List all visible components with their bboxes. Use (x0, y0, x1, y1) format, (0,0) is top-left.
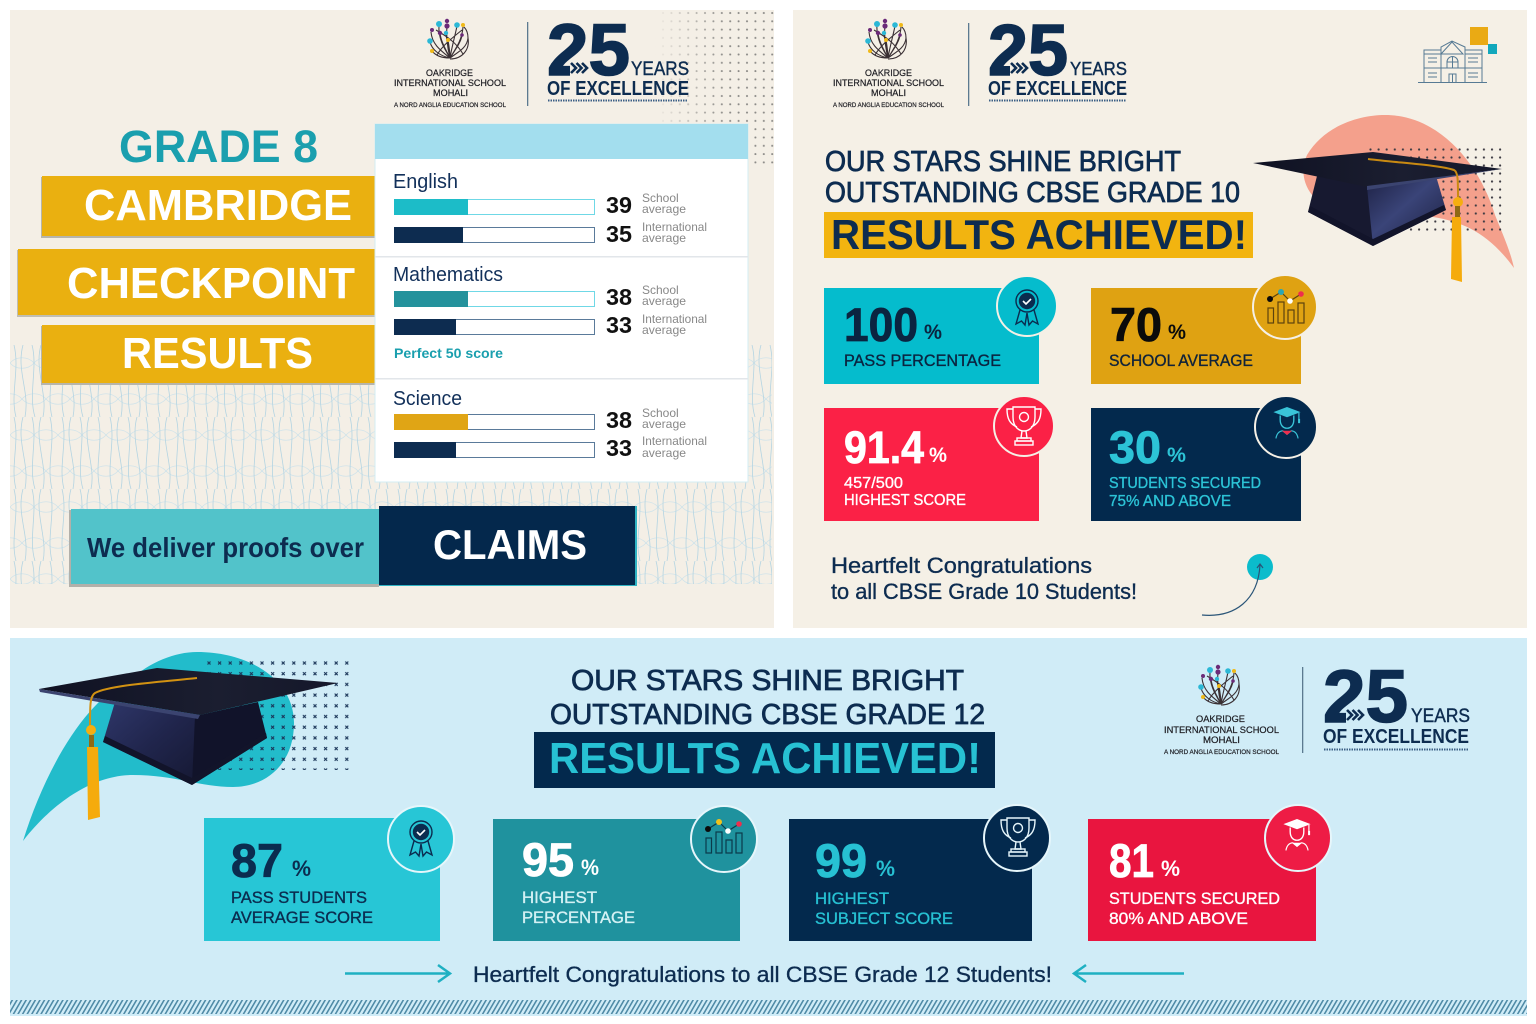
subject: English: average (642, 231, 686, 245)
25 years of excellence mark: OF EXCELLENCE (1323, 726, 1469, 748)
school logo: INTERNATIONAL SCHOOL (833, 78, 944, 88)
graduation cap with teal blob (23, 652, 351, 841)
card: 81% students secured: % (1161, 856, 1180, 881)
card: 30% students secured: 75% AND ABOVE (1109, 493, 1231, 510)
card: 70% school average: % (1168, 321, 1186, 344)
25 years of excellence mark (988, 11, 1127, 100)
card: 87% pass students average score: % (292, 856, 311, 881)
25 years of excellence mark: YEARS (1411, 706, 1470, 727)
card: 99% highest subject score: HIGHEST (815, 889, 889, 908)
subject: Science (393, 388, 707, 461)
card: 100% pass percentage: 100 (844, 298, 918, 351)
icon: trophy (984, 805, 1050, 871)
icon: graduate (1255, 396, 1317, 458)
25 years of excellence mark: YEARS (631, 59, 689, 80)
subject: Mathematics: average (642, 323, 686, 337)
card: 91.4% highest score (824, 396, 1054, 521)
school logo: INTERNATIONAL SCHOOL (394, 78, 506, 88)
tagline: proofs over claims: CLAIMS (433, 521, 587, 568)
heading: RESULTS ACHIEVED! (549, 734, 981, 783)
card: 81% students secured: 81 (1109, 834, 1154, 887)
arrow: left-pointing teal (1074, 965, 1184, 982)
subject: Science: 38 (606, 407, 632, 433)
heading: Grade 8: GRADE 8 (119, 121, 318, 172)
tagline: proofs over claims (69, 506, 637, 587)
school logo: MOHALI (871, 88, 906, 98)
school logo: A NORD ANGLIA EDUCATION SCHOOL (394, 102, 506, 109)
25 years of excellence mark: 25 (547, 10, 630, 91)
heading: RESULTS ACHIEVED! (831, 211, 1247, 258)
card: 81% students secured: 80% AND ABOVE (1109, 909, 1248, 928)
icon: ribbon (388, 806, 454, 872)
school logo (394, 19, 506, 109)
card: 30% students secured: STUDENTS SECURED (1109, 475, 1261, 492)
card: 99% highest subject score: 99 (815, 834, 867, 887)
congratulations message (831, 553, 1137, 604)
icon: ribbon (997, 276, 1057, 336)
school logo: MOHALI (433, 88, 468, 98)
card: 91.4% highest score: 457/500 (844, 475, 903, 492)
card: 99% highest subject score (789, 805, 1050, 941)
congratulations message: Heartfelt Congratulations (831, 553, 1092, 578)
school logo: MOHALI (1203, 735, 1240, 745)
card: 87% pass students average score: PASS STUDENTS (231, 888, 367, 907)
school logo: INTERNATIONAL SCHOOL (1164, 725, 1279, 735)
25 years of excellence mark: OF EXCELLENCE (547, 78, 689, 100)
heading (534, 665, 995, 788)
icon: bar chart (1253, 275, 1317, 339)
card: 91.4% highest score: % (929, 444, 947, 467)
subject: Science: Science (393, 388, 462, 410)
card: 95% highest percentage (493, 806, 757, 941)
subject: English: School (642, 191, 679, 205)
subject: Mathematics: Mathematics (393, 264, 503, 286)
heading (824, 146, 1253, 258)
subject: Mathematics (393, 264, 707, 361)
subject: Science: average (642, 446, 686, 460)
25 years of excellence mark: 25 (1323, 655, 1408, 738)
icon: bar chart (691, 806, 757, 872)
arrow: curved up to teal dot (1202, 554, 1273, 615)
card: 70% school average (1091, 275, 1317, 384)
subject: English: International (642, 220, 707, 234)
banner: Results: RESULTS (122, 329, 313, 378)
subject: Mathematics: 38 (606, 284, 632, 310)
card: 91.4% highest score: 91.4 (844, 422, 924, 473)
subject: Science: average (642, 417, 686, 431)
25 years of excellence mark: OF EXCELLENCE (988, 78, 1127, 100)
results table (375, 124, 748, 482)
arrow: right-pointing teal (345, 965, 450, 982)
banner: Checkpoint (17, 249, 375, 317)
card: 70% school average: 70 (1110, 298, 1162, 351)
card: 100% pass percentage: PASS PERCENTAGE (844, 351, 1001, 370)
25 years of excellence mark: YEARS (1070, 58, 1127, 79)
25 years of excellence mark (547, 10, 689, 100)
card: 70% school average: SCHOOL AVERAGE (1109, 351, 1253, 370)
icon: graduate (1265, 805, 1331, 871)
card: 81% students secured: STUDENTS SECURED (1109, 889, 1280, 908)
card: 95% highest percentage: HIGHEST (522, 888, 597, 907)
heading: OUTSTANDING CBSE GRADE 12 (550, 699, 985, 731)
subject: English: average (642, 202, 686, 216)
graduation cap with salmon blob (1253, 115, 1514, 282)
25 years of excellence mark: 25 (988, 11, 1068, 91)
school logo: OAKRIDGE (1196, 714, 1245, 724)
card: 30% students secured: 30 (1109, 422, 1161, 473)
tagline: proofs over claims: We deliver proofs over (87, 532, 364, 563)
subject: Mathematics: 33 (606, 312, 632, 338)
heading: OUR STARS SHINE BRIGHT (825, 146, 1181, 178)
subject: English: 35 (606, 221, 632, 247)
banner: Checkpoint: CHECKPOINT (67, 259, 355, 308)
subject: English: 39 (606, 192, 632, 218)
subject: Mathematics: Perfect 50 score (394, 345, 503, 361)
subject: Science: 33 (606, 435, 632, 461)
card: 87% pass students average score: AVERAGE SCORE (231, 908, 373, 927)
subject: Science: School (642, 406, 679, 420)
card: 87% pass students average score (204, 806, 454, 941)
subject: Mathematics: School (642, 283, 679, 297)
panel: CBSE Grade 10 results (793, 10, 1527, 628)
card: 30% students secured: % (1167, 444, 1186, 467)
card: 81% students secured (1088, 805, 1331, 941)
card: 30% students secured (1091, 396, 1317, 521)
school logo: A NORD ANGLIA EDUCATION SCHOOL (1164, 749, 1279, 756)
panel: CBSE Grade 12 results (10, 638, 1527, 1016)
subject: Mathematics: average (642, 294, 686, 308)
school logo: A NORD ANGLIA EDUCATION SCHOOL (833, 102, 944, 109)
congratulations message: Heartfelt Congratulations to all CBSE Grade 12 Students! (473, 962, 1052, 987)
school logo (1164, 665, 1279, 756)
25 years of excellence mark (1323, 655, 1470, 750)
card: 95% highest percentage: % (581, 855, 599, 880)
heading: OUTSTANDING CBSE GRADE 10 (825, 177, 1240, 209)
school logo (833, 19, 944, 109)
heading: OUR STARS SHINE BRIGHT (571, 665, 964, 697)
panel: Grade 8 Cambridge Checkpoint results (10, 10, 774, 628)
school logo: OAKRIDGE (865, 68, 912, 78)
card: 95% highest percentage: PERCENTAGE (522, 908, 635, 927)
card: 100% pass percentage (824, 276, 1057, 384)
subject: Mathematics: International (642, 312, 707, 326)
card: 91.4% highest score: HIGHEST SCORE (844, 492, 966, 509)
congratulations message: to all CBSE Grade 10 Students! (831, 579, 1137, 604)
icon: school building (1418, 27, 1497, 82)
card: 99% highest subject score: % (876, 856, 895, 881)
school logo: OAKRIDGE (426, 68, 473, 78)
card: 87% pass students average score: 87 (231, 834, 283, 887)
card: 100% pass percentage: % (924, 321, 942, 344)
banner: Results (41, 325, 375, 385)
icon: trophy (994, 396, 1054, 456)
card: 95% highest percentage: 95 (522, 833, 574, 886)
banner: Cambridge: CAMBRIDGE (84, 181, 352, 230)
subject: English (393, 171, 707, 247)
banner: Cambridge (41, 176, 375, 238)
subject: Science: International (642, 434, 707, 448)
card: 99% highest subject score: SUBJECT SCORE (815, 909, 953, 928)
subject: English: English (393, 171, 458, 193)
